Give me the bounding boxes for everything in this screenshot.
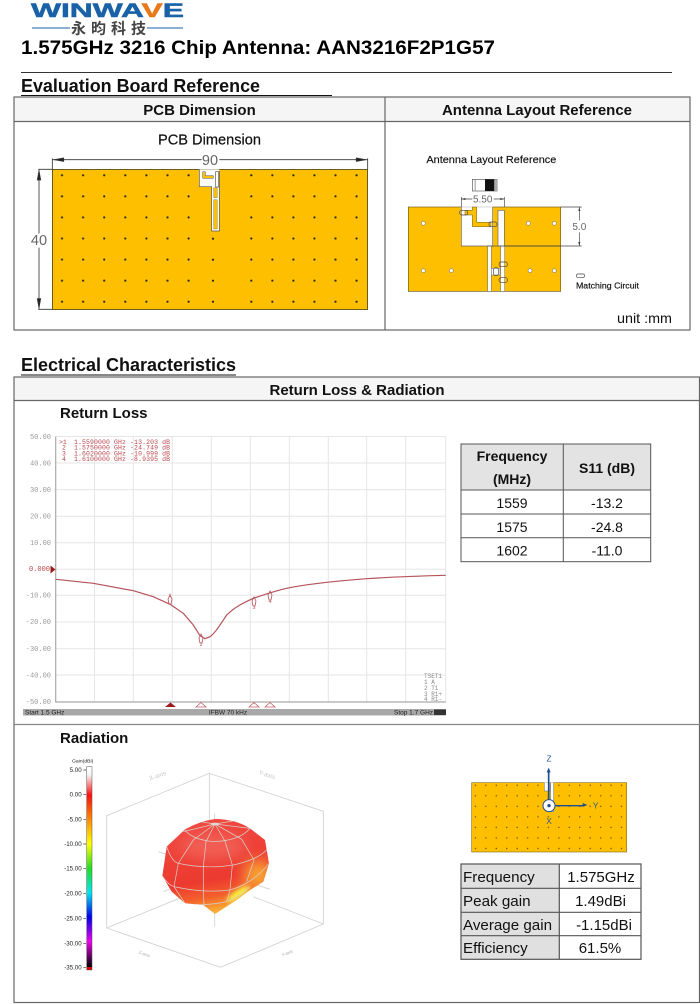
dimensions <box>461 197 582 246</box>
table: antenna performance: 1.575GHz <box>567 869 635 886</box>
title: 1.575GHz 3216 Chip Antenna: AAN3216F2P1G57 <box>21 37 495 59</box>
legend: matching circuit <box>577 274 584 277</box>
marker readout: 4 <box>62 456 66 463</box>
marker readout: 3 <box>62 450 66 458</box>
chart: return loss: 3 <box>252 604 256 611</box>
diagram: coordinate orientation on PCB: Y <box>593 801 599 811</box>
marker readout: 1.5590000 GHz -13.203 dB <box>74 439 170 446</box>
y axis labels: -50.00 <box>26 699 51 707</box>
header: antenna layout reference: Antenna Layout Reference <box>442 102 632 119</box>
y axis labels: -20.00 <box>26 619 51 627</box>
logo: WINWA V E <box>31 1 184 22</box>
y axis labels: -30.00 <box>26 646 51 654</box>
chart: return loss: Start 1.5 GHz <box>25 710 64 716</box>
trace legend <box>424 673 442 703</box>
header: PCB dimension: PCB Dimension <box>143 102 256 119</box>
diagram: coordinate orientation on PCB: Z <box>546 753 552 763</box>
table: S11: S11 (dB) <box>579 460 635 476</box>
diagram: antenna layout reference: 5.0 <box>572 222 587 233</box>
y axis labels: 50.00 <box>30 434 51 442</box>
heading: electrical characteristics: Electrical Characteristics <box>21 355 236 375</box>
colour scale: 0.00 <box>70 792 82 799</box>
radiation lobe <box>162 819 269 914</box>
colour scale: -15.00 <box>64 866 82 873</box>
label: 90: 90 <box>202 153 218 169</box>
bottom markers <box>165 702 176 707</box>
colour scale: Gain(dBi) <box>72 758 94 763</box>
colour scale: -10.00 <box>64 841 82 848</box>
notch <box>461 206 493 246</box>
diagram: PCB dimension: PCB Dimension <box>158 132 261 148</box>
panel header: Return Loss & Radiation <box>269 382 445 399</box>
3D box <box>107 773 323 967</box>
colour scale: -30.00 <box>64 940 82 947</box>
y axis labels: -40.00 <box>26 672 51 680</box>
trace legend: TSET1 <box>424 673 442 680</box>
chart: return loss: 1 <box>168 592 172 599</box>
chart: 3D radiation pattern: Y-axis <box>258 769 276 781</box>
table: antenna performance: Average gain <box>463 917 552 934</box>
marker readout: 1.6020000 GHz -10.999 dB <box>74 450 170 458</box>
table: S11: 1602 <box>496 542 528 558</box>
table: antenna performance: 61.5% <box>579 940 621 957</box>
trace legend: 2 T1 <box>424 685 439 692</box>
logo: 永昀科技 <box>71 20 146 38</box>
table: S11: -11.0 <box>592 542 623 558</box>
diagram: coordinate orientation on PCB: X <box>546 816 552 826</box>
table: S11: (MHz) <box>493 471 531 487</box>
diagram: antenna layout reference <box>408 155 640 291</box>
chart: return loss: 2 <box>199 641 203 648</box>
return loss curve <box>56 575 446 639</box>
y axis labels: 0.000 <box>29 566 50 574</box>
marker readout: 1.5750000 GHz -24.749 dB <box>74 445 170 452</box>
heading: return loss: Return Loss <box>60 405 148 422</box>
heading: radiation: Radiation <box>60 730 128 747</box>
label: 40: 40 <box>31 233 47 249</box>
marker readout <box>59 439 170 463</box>
chart: 3D radiation pattern: Z-axis <box>138 950 151 958</box>
table: S11 <box>461 444 651 562</box>
chart: 3D radiation pattern: X-axis <box>148 770 167 783</box>
diagram: antenna layout reference: Antenna Layout Reference <box>426 155 557 166</box>
curve markers <box>168 591 272 643</box>
y axis labels: 40.00 <box>30 460 51 468</box>
table: antenna performance: 1.49dBi <box>575 893 626 910</box>
chart: return loss <box>23 434 446 716</box>
status bar <box>23 709 446 716</box>
table: antenna performance: Peak gain <box>463 893 531 910</box>
chart: return loss: IFBW 70 kHz <box>209 710 247 716</box>
table: antenna performance: Efficiency <box>463 940 528 957</box>
chart: return loss: Stop 1.7 GHz <box>394 710 433 716</box>
diagram: antenna layout reference: Matching Circuit <box>576 281 640 291</box>
table: antenna performance <box>461 864 641 959</box>
heading: evaluation board reference: Evaluation Board Reference <box>21 76 260 96</box>
table: antenna performance: Frequency <box>463 869 535 886</box>
marker readout: 2 <box>62 445 66 452</box>
panel: return loss and radiation <box>14 377 700 1002</box>
trace legend: 4 R1- <box>424 696 442 703</box>
table: antenna performance: -1.15dBi <box>576 917 632 934</box>
colour scale: -20.00 <box>64 890 82 897</box>
panel: evaluation board table <box>14 97 690 330</box>
colour scale: 5.00 <box>70 767 82 774</box>
unit note: unit :mm <box>617 310 672 326</box>
table: S11: 1559 <box>496 495 528 511</box>
y axis labels: 20.00 <box>30 514 51 522</box>
table: S11: -13.2 <box>591 495 623 511</box>
table: S11: Frequency <box>477 448 548 464</box>
colour scale <box>64 758 94 971</box>
y axis labels: 30.00 <box>30 487 51 495</box>
marker readout: 1.6100000 GHz -8.9395 dB <box>74 456 170 463</box>
colour scale: -25.00 <box>64 915 82 922</box>
diagram: antenna layout reference: 5.50 <box>473 195 493 206</box>
logo <box>31 1 184 38</box>
colour scale: -5.00 <box>68 816 82 823</box>
trace legend: 1 A <box>424 679 435 686</box>
chip <box>472 179 497 191</box>
colour scale: -35.00 <box>64 964 82 971</box>
antenna trace <box>465 207 491 227</box>
diagram: PCB dimension <box>31 132 368 312</box>
chart: 3D radiation pattern <box>64 758 323 971</box>
table: S11: -24.8 <box>591 519 623 535</box>
chart: 3D radiation pattern: Y-axis <box>281 949 293 958</box>
reference triangle <box>50 566 56 574</box>
chart: return loss: 4 <box>268 598 272 605</box>
table: S11: 1575 <box>496 519 528 535</box>
trace legend: 3 R1+ <box>424 691 442 698</box>
diagram: coordinate orientation on PCB <box>472 753 627 852</box>
y axis labels: -10.00 <box>26 592 51 600</box>
y axis labels: 10.00 <box>30 540 51 548</box>
marker readout: >1 <box>59 439 67 446</box>
y axis labels <box>26 434 51 707</box>
